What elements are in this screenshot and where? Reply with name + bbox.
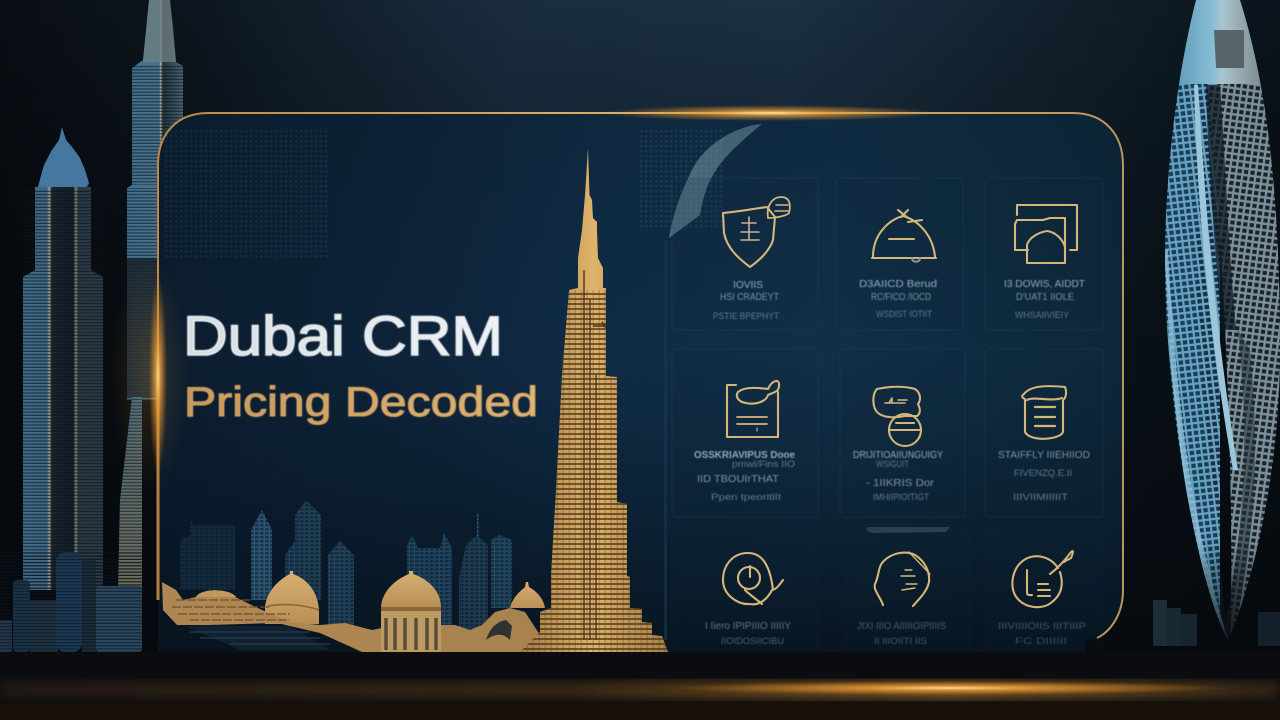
icon: service bell	[872, 210, 936, 262]
small buildings right	[1153, 600, 1280, 646]
title line 1: Dubai CRM	[183, 304, 503, 367]
tower: lower tapered tower	[118, 397, 142, 590]
card 4: pmwl/Fins IIO	[732, 459, 795, 469]
card 2: WSDIST IOTIIT	[876, 309, 932, 319]
card 2	[859, 210, 937, 319]
card 4	[694, 381, 795, 502]
card grid	[664, 178, 1103, 649]
card 8	[857, 552, 946, 646]
card 1: IOVIIS	[733, 280, 763, 291]
water stripes	[185, 626, 330, 650]
card shard highlight	[866, 527, 950, 533]
right terrain	[441, 608, 552, 652]
bottom light band	[0, 652, 1280, 720]
card 1	[713, 197, 790, 321]
tower: tall rear tower	[127, 0, 183, 400]
card 6: FIVENZQ.E.II	[1014, 468, 1072, 478]
dot texture left	[165, 130, 330, 260]
card 5: WSIGUIT	[876, 459, 909, 469]
card 4: Ppen tpeoritlIt	[711, 492, 782, 502]
dome 2 with colonnade	[381, 571, 441, 652]
card 4: IID TBOUIrTHAT	[697, 474, 779, 485]
vertical rail	[664, 240, 667, 640]
card 1: PSTIE BPEPHYT	[713, 311, 779, 321]
icon: head profile	[875, 552, 930, 606]
card 6: IIIVIIMIIIIIT	[1013, 492, 1069, 502]
icon: chat bubble and badge	[873, 387, 921, 446]
terrain	[162, 582, 382, 652]
icon: jar	[1022, 386, 1066, 439]
card 2: D3AIICD Berud	[859, 279, 937, 290]
card 4: OSSKRIAVIPUS Dooe	[694, 450, 795, 461]
icon: document with note	[727, 381, 779, 437]
card 6	[998, 386, 1090, 502]
left skyline towers	[0, 0, 183, 652]
icon: clock circle	[723, 553, 783, 604]
card 3	[1004, 205, 1085, 320]
card 7: IIOIDOSIICIBU	[721, 636, 784, 646]
dot texture right	[640, 128, 725, 228]
icon: circle with pen	[1012, 551, 1073, 607]
card 7: I Iiero IPIPIIIO IIIIIY	[705, 621, 791, 632]
card 5	[853, 387, 943, 502]
blue skyline inside panel	[170, 500, 520, 635]
card 5: IMHIIPIOITIGT	[873, 492, 929, 502]
card 3: D'UAT1 IIOLE	[1016, 292, 1074, 303]
card 3: I3 DOWIS, AIDDT	[1004, 279, 1085, 290]
card 1: HSI CRADEYT	[720, 292, 779, 303]
icon: folders	[1015, 205, 1077, 263]
card 7	[705, 553, 791, 646]
card 2: RC/FICO /IOCD	[871, 292, 931, 303]
card 9: FC DIIIIII	[1015, 636, 1067, 646]
panel border lower-left	[156, 380, 160, 600]
top glow	[600, 105, 940, 121]
left glow	[149, 275, 167, 475]
card 8: JIXI IIIO AIIIIIOIPIIIIS	[857, 621, 946, 632]
card 5: DRIJITIOAIIUNGUIGY	[853, 450, 943, 461]
main rounded panel	[110, 105, 1123, 652]
card 6: STAIFFLY IIIEHIIOD	[998, 450, 1090, 461]
card 9	[998, 551, 1086, 646]
tower: main stepped-crown tower	[23, 127, 103, 590]
burj khalifa tower	[520, 148, 670, 652]
card frames	[672, 178, 1103, 649]
left small dome	[196, 590, 236, 597]
gold terrain and landmark base	[162, 571, 552, 652]
dome 1	[265, 571, 319, 624]
low-rise buildings	[0, 552, 142, 652]
small dome	[510, 582, 545, 608]
right twisted lens tower	[1153, 0, 1280, 650]
title	[183, 304, 538, 425]
panel border	[158, 113, 1123, 638]
title line 2: Pricing Decoded	[184, 378, 538, 425]
icon: shield	[723, 197, 790, 267]
card 8: II IIIOIITI IIS	[874, 636, 927, 646]
card 9: IIIVIIIIOIIS IIITIIIP	[998, 621, 1086, 631]
card 5: - 1IIKRIS Dor	[866, 478, 935, 489]
card 3: WHSAIIVIEIY	[1015, 310, 1069, 320]
glass shard	[669, 124, 762, 238]
